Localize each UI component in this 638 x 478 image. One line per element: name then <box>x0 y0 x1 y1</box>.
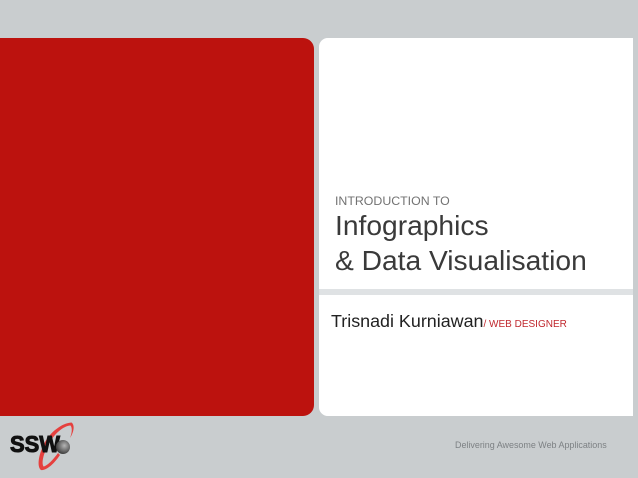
text: author: Trisnadi Kurniawan/ WEB DESIGNER <box>331 311 567 331</box>
heading: title: & Data Visualisation <box>335 244 587 276</box>
heading: title <box>335 209 587 276</box>
panel: red block <box>0 38 314 416</box>
panel: title card <box>319 38 633 416</box>
heading: title: Infographics <box>335 209 489 241</box>
logo ring <box>39 422 74 470</box>
text: introduction to: INTRODUCTION TO <box>335 194 450 208</box>
text: tagline: Delivering Awesome Web Applications <box>455 440 607 450</box>
panel: lower white card <box>319 295 633 416</box>
panel: upper white card <box>319 38 633 289</box>
logo ball <box>56 440 70 454</box>
icon: SSW logo <box>10 422 74 470</box>
logo text: SSW <box>10 431 60 457</box>
